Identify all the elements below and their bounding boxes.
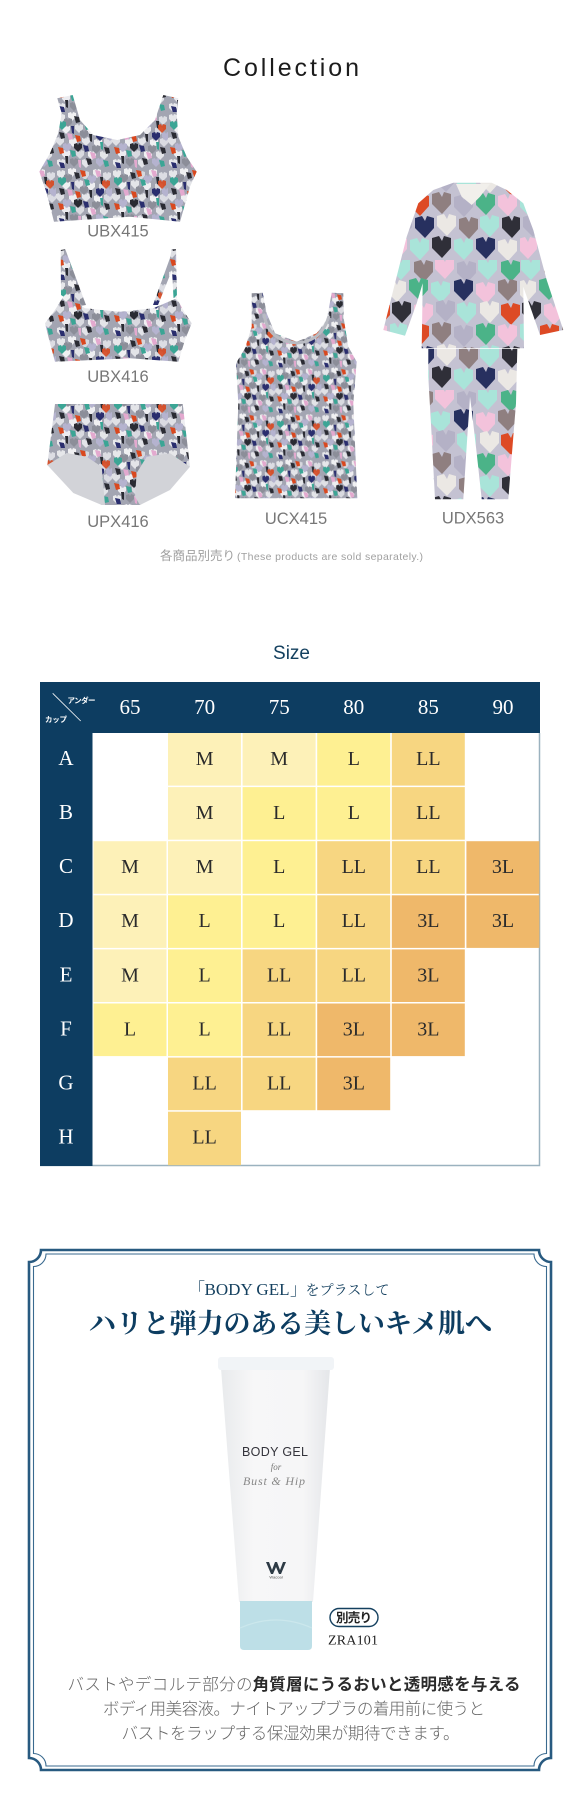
size cells: M bbox=[270, 748, 288, 770]
gel description bbox=[68, 1674, 520, 1743]
heading: Size: Size bbox=[273, 643, 310, 664]
size cells: LL bbox=[416, 748, 441, 770]
size cells: LL bbox=[342, 964, 366, 986]
table header row: 90 bbox=[492, 695, 514, 719]
cup size column: G bbox=[58, 1070, 74, 1094]
size cells: L bbox=[124, 1018, 136, 1040]
cup size column bbox=[40, 733, 92, 1166]
size cells: L bbox=[348, 748, 360, 770]
badge: sold separately bbox=[330, 1608, 378, 1626]
panel: body gel bbox=[29, 1250, 551, 1770]
table header row: 75 bbox=[269, 695, 290, 719]
size cells: L bbox=[198, 964, 211, 986]
badge: sold separately: 別売り bbox=[336, 1610, 372, 1625]
size cells: LL bbox=[416, 856, 441, 878]
size cells: LL bbox=[267, 964, 291, 986]
size cells: LL bbox=[267, 1018, 291, 1040]
table header row: 70 bbox=[194, 695, 215, 719]
note: sold separately: 各商品別売り bbox=[160, 548, 235, 563]
size cells: L bbox=[348, 802, 360, 824]
gel description: 角質層にうるおいと透明感を与える bbox=[252, 1674, 520, 1694]
table header row: 65 bbox=[120, 695, 140, 719]
gel description: ボディ用美容液。ナイトアップブラの着用前に使うと bbox=[103, 1700, 485, 1718]
cup size column: B bbox=[59, 800, 73, 824]
size cells: L bbox=[273, 910, 285, 932]
cup size column: A bbox=[58, 746, 74, 770]
size cells: 3L bbox=[343, 1018, 365, 1040]
size cells bbox=[94, 733, 539, 1165]
gel subheading: 「 bbox=[188, 1280, 205, 1299]
product: UBX415 bra top: UBX415 bbox=[87, 222, 149, 240]
illustration: body gel tube: for bbox=[271, 1462, 282, 1472]
illustration: body gel tube: Wacoal bbox=[269, 1574, 283, 1580]
size cells: 3L bbox=[343, 1072, 365, 1094]
size cells: L bbox=[273, 802, 285, 824]
cup size column: E bbox=[60, 962, 72, 986]
gel subheading: BODY GEL bbox=[204, 1280, 290, 1299]
size cells: M bbox=[121, 964, 139, 986]
gel subheading: をプラスして bbox=[306, 1283, 390, 1299]
size cells: 3L bbox=[492, 910, 514, 932]
size cells: L bbox=[198, 1018, 211, 1040]
size cells: M bbox=[196, 802, 214, 824]
size cells: L bbox=[273, 856, 285, 878]
table header row: アンダー bbox=[68, 695, 96, 705]
gel subheading: 」 bbox=[290, 1280, 307, 1299]
size cells: LL bbox=[267, 1072, 291, 1094]
product: UPX416 shorts: UPX416 bbox=[87, 513, 149, 531]
size cells: L bbox=[198, 910, 211, 932]
size cells: M bbox=[196, 748, 214, 770]
product: UBX415 bra top bbox=[39, 95, 197, 240]
product: UDX563 pajama set: UDX563 bbox=[442, 510, 504, 528]
cup size column: H bbox=[58, 1124, 74, 1148]
size cells: LL bbox=[342, 910, 366, 932]
gel description: バストをラップする保湿効果が期待できます。 bbox=[122, 1724, 460, 1743]
size cells: M bbox=[121, 910, 139, 932]
cup size column: C bbox=[59, 854, 73, 878]
gel description: バストやデコルテ部分の bbox=[68, 1675, 252, 1694]
size cells: LL bbox=[192, 1126, 217, 1148]
size cells: 3L bbox=[417, 964, 440, 986]
cup size column: F bbox=[60, 1016, 72, 1040]
product: UPX416 shorts bbox=[47, 404, 190, 531]
table header row: 80 bbox=[343, 695, 364, 719]
illustration: body gel tube: BODY GEL bbox=[242, 1445, 308, 1459]
size table bbox=[40, 682, 540, 1166]
gel headline: ハリと弾力のある美しいキメ肌へ bbox=[89, 1309, 492, 1339]
size cells: M bbox=[121, 856, 139, 878]
product code: ZRA101 bbox=[328, 1634, 378, 1648]
title: Collection: Collection bbox=[223, 54, 359, 82]
size cells: M bbox=[196, 856, 214, 878]
size cells: 3L bbox=[417, 1018, 440, 1040]
table header row bbox=[40, 682, 540, 733]
gel subheading bbox=[188, 1280, 390, 1299]
product: UBX416 bra bbox=[45, 249, 192, 386]
illustration: body gel tube bbox=[218, 1357, 334, 1650]
product: UCX415 camisole bbox=[235, 293, 357, 528]
note: sold separately bbox=[160, 548, 423, 563]
size cells: LL bbox=[416, 802, 441, 824]
product: UBX416 bra: UBX416 bbox=[87, 368, 149, 386]
size cells: LL bbox=[342, 856, 366, 878]
illustration: body gel tube: Bust & Hip bbox=[243, 1474, 305, 1488]
cup size column: D bbox=[58, 908, 74, 932]
size cells: 3L bbox=[492, 856, 514, 878]
table header row: 85 bbox=[418, 695, 439, 719]
size cells: LL bbox=[192, 1072, 217, 1094]
size cells: 3L bbox=[417, 910, 440, 932]
product: UCX415 camisole: UCX415 bbox=[265, 510, 327, 528]
note: sold separately: (These products are sold separately.) bbox=[237, 551, 423, 563]
panel frame bbox=[29, 1250, 551, 1770]
product: UDX563 pajama set bbox=[383, 183, 563, 527]
table header row: カップ bbox=[45, 715, 68, 724]
